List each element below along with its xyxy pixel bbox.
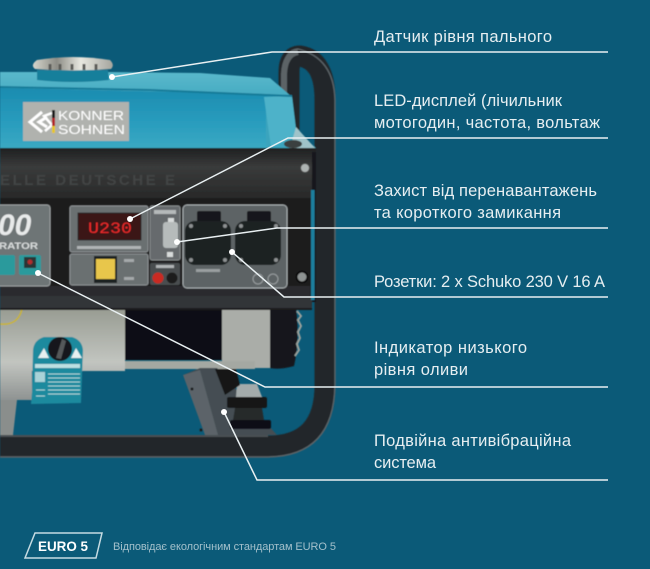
label: anti-vibration system: система	[374, 454, 437, 472]
label: anti-vibration system	[374, 432, 572, 472]
leader line: LED display	[127, 138, 608, 222]
handle frame tube	[0, 49, 335, 457]
label: fuel level sensor: Датчик рівня пального	[374, 28, 552, 46]
label: anti-vibration system: Подвійна антивібраційна	[374, 432, 572, 450]
leader line: fuel level sensor	[109, 52, 608, 80]
label: low oil indicator	[374, 339, 527, 379]
teal fuel tank housing	[0, 72, 316, 148]
brand logo plate	[23, 102, 129, 141]
12 V terminals	[150, 263, 180, 285]
label: low oil indicator: Індикатор низького	[374, 339, 527, 357]
lower engine block	[0, 305, 301, 435]
socket right	[235, 211, 281, 265]
label: LED display: мотогодин, частота, вольтаж	[374, 114, 600, 132]
socket panel	[183, 205, 287, 288]
black control housing: ELLE DEUTSCHE E	[0, 172, 175, 189]
fuel cap	[33, 57, 113, 82]
leader line: overload protection	[174, 228, 608, 245]
anti-vibration mount	[183, 368, 277, 435]
socket left	[185, 211, 231, 265]
brand logo plate: KONNER	[58, 108, 124, 123]
black control housing	[0, 148, 316, 310]
LED display panel	[70, 206, 148, 252]
overload breaker panel	[150, 206, 180, 260]
brand logo plate: SOHNEN	[58, 122, 125, 137]
model label panel	[0, 205, 50, 286]
power switch panel	[70, 254, 148, 285]
warning tag with fuel knob	[31, 337, 83, 404]
leader line: sockets	[229, 249, 608, 297]
label: overload protection: Захист від перенавантажень	[374, 182, 597, 200]
EURO 5 badge: EURO 5	[38, 538, 88, 554]
label: overload protection: та короткого замикання	[374, 204, 561, 222]
leader line: low oil indicator	[35, 270, 608, 387]
label: LED display	[374, 92, 600, 132]
EURO 5 badge	[25, 533, 102, 558]
leader line: anti-vibration system	[221, 409, 608, 480]
generator illustration	[0, 49, 335, 457]
label: LED display: LED-дисплей (лічильник	[374, 92, 563, 110]
EURO 5 compliance note: Відповідає екологічним стандартам EURO 5	[113, 541, 336, 553]
label: sockets: Розетки: 2 x Schuko 230 V 16 A	[374, 273, 605, 291]
label: low oil indicator: рівня оливи	[374, 361, 468, 379]
LED display panel: U230	[88, 220, 132, 238]
label: overload protection	[374, 182, 597, 222]
